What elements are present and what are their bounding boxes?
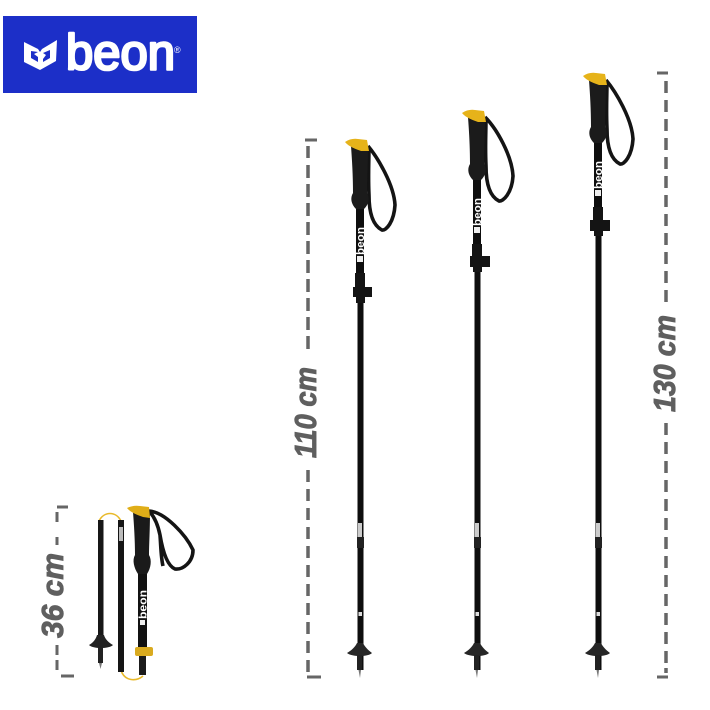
basket and tip xyxy=(464,643,489,656)
logo wordmark: beon xyxy=(66,24,175,80)
dimension: 130 cm: 130 cm xyxy=(647,315,682,412)
joint xyxy=(595,537,602,548)
yellow connecting cords xyxy=(99,514,143,680)
pole brand text: beon xyxy=(355,227,367,255)
shaft xyxy=(594,139,602,670)
folded pole: segments and grip xyxy=(89,506,193,680)
shaft xyxy=(356,205,364,670)
strap xyxy=(485,117,513,201)
yellow grip cap xyxy=(127,506,150,518)
yellow grip cap xyxy=(345,139,369,151)
grip xyxy=(589,80,607,143)
pole brand text: beon xyxy=(593,161,605,189)
small marker xyxy=(596,612,600,616)
strap xyxy=(149,511,193,569)
pole at 110 cm xyxy=(345,139,395,678)
dimension: 110 cm xyxy=(288,140,323,677)
height clamp xyxy=(470,244,490,272)
basket and tip xyxy=(347,643,372,656)
strap xyxy=(368,146,395,230)
middle segment xyxy=(118,520,124,672)
pole brand icon xyxy=(595,190,601,196)
icon: beon shield mark xyxy=(24,40,57,70)
small marker xyxy=(358,612,362,616)
section label xyxy=(475,523,479,537)
height clamp xyxy=(590,207,610,236)
pole brand icon xyxy=(357,256,363,262)
shaft xyxy=(473,176,481,670)
basket and tip xyxy=(585,643,610,656)
pole at 120 cm xyxy=(462,110,513,678)
dimension: 130 cm xyxy=(647,73,682,677)
pole at 130 cm xyxy=(583,73,633,678)
dimension: 36 cm: 36 cm xyxy=(35,553,70,638)
lower segment with basket xyxy=(89,520,113,669)
pole brand icon xyxy=(140,620,145,625)
pole brand text: beon xyxy=(138,590,150,619)
small marker xyxy=(476,612,479,616)
grip xyxy=(351,146,369,209)
registered mark: ® xyxy=(174,45,181,55)
dimension: 36 cm xyxy=(35,507,74,676)
shaft and clamp xyxy=(135,570,153,675)
dimension: 110 cm: 110 cm xyxy=(288,367,323,458)
strap xyxy=(606,80,633,164)
pole brand icon xyxy=(474,227,480,233)
height clamp xyxy=(353,273,372,303)
logo: beon brand badge xyxy=(3,16,197,93)
yellow grip cap xyxy=(462,110,486,122)
pole brand text: beon xyxy=(472,198,484,226)
joint xyxy=(357,537,364,548)
section label xyxy=(596,523,600,537)
yellow grip cap xyxy=(583,73,607,85)
section label xyxy=(358,523,362,537)
grip xyxy=(133,512,151,574)
grip xyxy=(468,117,486,180)
joint xyxy=(474,537,481,548)
